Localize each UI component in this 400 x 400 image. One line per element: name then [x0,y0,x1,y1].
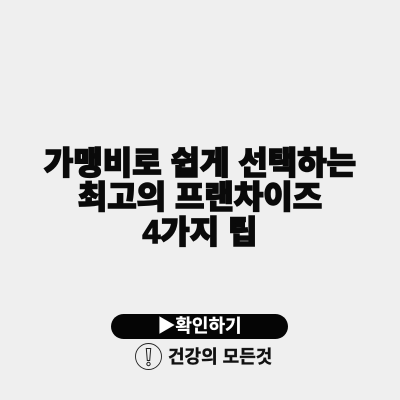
button: confirm [111,314,288,339]
title: 최고의 프랜차이즈 [78,179,322,215]
icon: exclamation in circle [135,343,162,370]
button: confirm: ▶확인하기 [157,316,242,336]
title: 가맹비로 쉽게 선택하는 [44,145,356,181]
title: 4가지 팁 [142,214,258,250]
source label with icon [135,343,272,370]
title [44,145,356,250]
site name: 건강의 모든것 [168,347,272,367]
